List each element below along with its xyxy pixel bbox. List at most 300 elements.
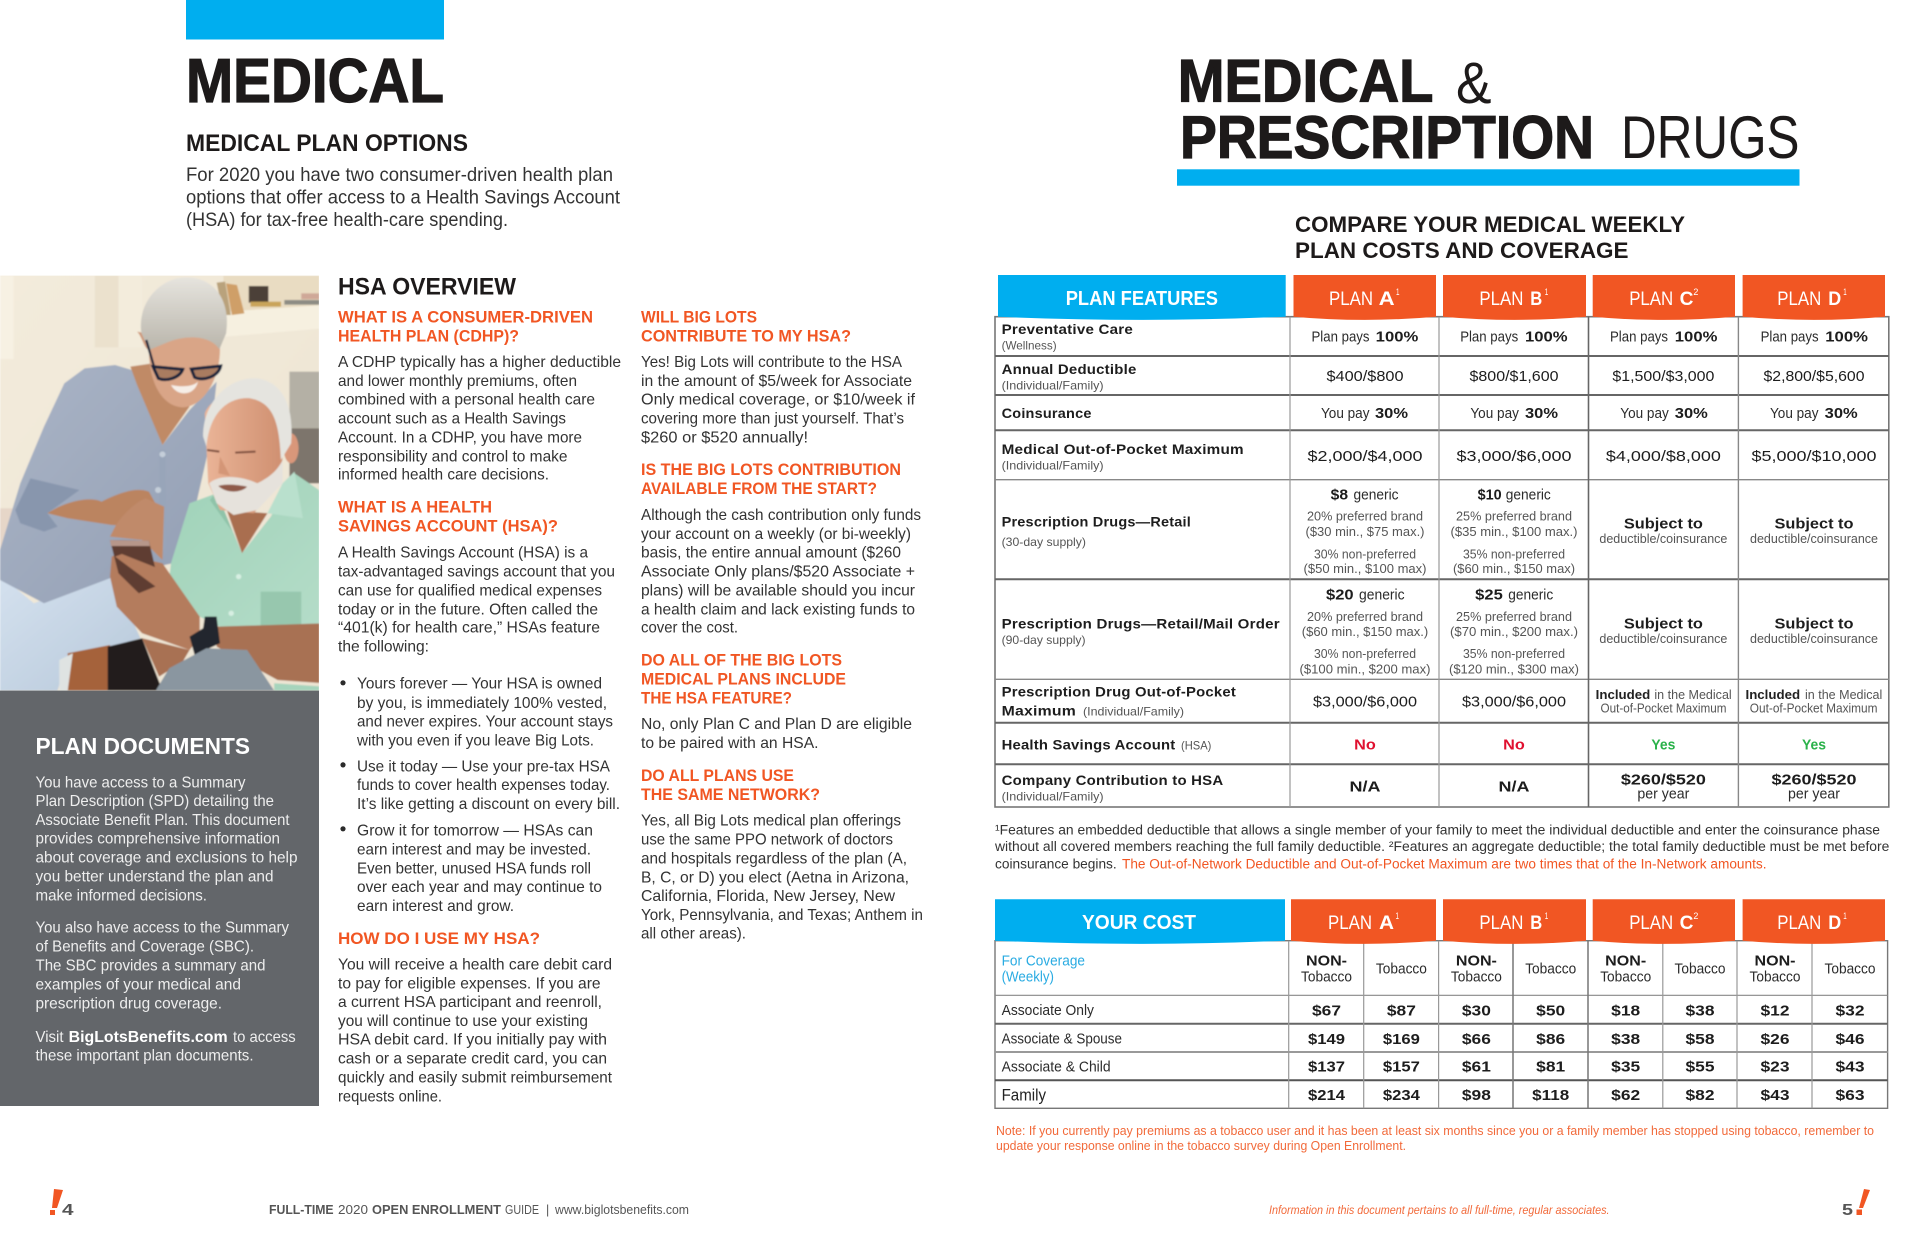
footer guide text: OPEN ENROLLMENT (372, 1203, 501, 1217)
hands and phone (110, 498, 164, 560)
row: associate and child (1002, 1059, 1864, 1076)
row: prescription drugs retail: generic (1354, 487, 1398, 503)
bullet list: funds to cover health expenses today. (357, 777, 610, 794)
header: plan C: 2 (1693, 911, 1698, 921)
row: associate and child: $23 (1760, 1059, 1790, 1076)
row: preventative care: 100% (1376, 329, 1418, 346)
row: prescription drugs retail/mail order: 25% preferred brand (1456, 610, 1572, 624)
row: company contribution to hsa: Company Contribution to HSA (1002, 772, 1223, 788)
row: for coverage weekly and tobacco headers: Tobacco (1600, 970, 1651, 986)
answer: same network: B, C, or D) you elect (Aetna in Arizona, (641, 869, 909, 886)
woman's chest and head (130, 363, 190, 445)
header: plan D: 1 (1843, 287, 1847, 297)
question: do all big lots plans include hsa: MEDICAL PLANS INCLUDE (641, 669, 846, 688)
footer right: disclaimer: Information in this document pertains to all full-time, regular associates. (1269, 1203, 1610, 1217)
question: will big lots contribute: CONTRIBUTE TO MY HSA? (641, 326, 851, 345)
row: prescription drugs retail/mail order: deductible/coinsurance (1750, 632, 1878, 646)
question: consumer-driven health plan: HEALTH PLAN (CDHP)? (338, 326, 519, 345)
header: plan C: PLAN (1629, 289, 1673, 310)
answer: how do I use my hsa (338, 956, 613, 1105)
table: plan features (995, 275, 1889, 807)
row: company contribution to hsa (1002, 771, 1856, 804)
answer: how do I use my hsa: You will receive a health care debit card (338, 956, 612, 973)
row: prescription drugs retail: (30-day supply) (1002, 535, 1086, 549)
row: family: $214 (1308, 1087, 1346, 1104)
row: for coverage weekly and tobacco headers: Tobacco (1301, 970, 1352, 986)
row: medical out-of-pocket maximum (1002, 441, 1876, 472)
header: plan B: PLAN (1479, 913, 1523, 934)
bullet list: Even better, unused HSA funds roll (357, 860, 591, 877)
intro text: options that offer access to a Health Savings Account (186, 187, 621, 209)
row: preventative care: Plan pays (1312, 330, 1370, 346)
answer: available from the start: a health claim and lack existing funds to (641, 601, 915, 618)
row: prescription drug out-of-pocket maximum: $3,000/$6,000 (1462, 694, 1566, 711)
row: preventative care: 100% (1825, 329, 1868, 346)
row: prescription drugs retail/mail order: generic (1508, 587, 1553, 603)
answer: do all big lots plans include hsa (641, 716, 912, 752)
heading: compare your medical weekly plan costs (1295, 212, 1685, 263)
heading: plan documents: PLAN DOCUMENTS (36, 733, 250, 759)
row: prescription drug out-of-pocket maximum: Prescription Drug Out-of-Pocket (1002, 684, 1236, 700)
row: prescription drugs retail: $8 (1331, 486, 1348, 503)
header: plan D: D (1828, 913, 1841, 934)
question: available from the start: AVAILABLE FROM THE START? (641, 479, 877, 498)
title: medical and prescription drugs: PRESCRIPTION (1180, 104, 1594, 171)
row: family: $43 (1760, 1087, 1790, 1104)
heading: medical plan options: MEDICAL PLAN OPTIONS (186, 130, 468, 157)
row: for coverage weekly and tobacco headers: Tobacco (1824, 961, 1876, 977)
row: company contribution to hsa: $260/$520 (1621, 771, 1706, 788)
footnotes: The Out-of-Network Deductible and Out-of-Pocket Maximum are two times that of the In-Network amounts. (1122, 856, 1766, 871)
row: for coverage weekly and tobacco headers: Tobacco (1750, 970, 1800, 986)
footnotes: without all covered members reaching the full family deductible. ²Features an aggregate deductible; the total family deductible must be met before (994, 839, 1889, 854)
row: associate and spouse: $86 (1536, 1031, 1565, 1048)
row: associate only: $30 (1462, 1003, 1491, 1020)
row: for coverage weekly and tobacco headers: Tobacco (1674, 961, 1726, 977)
row: annual deductible: Annual Deductible (1002, 361, 1137, 377)
row: prescription drugs retail: ($60 min., $150 max) (1453, 562, 1575, 576)
row: associate only (1002, 1003, 1864, 1020)
answer: will big lots contribute: in the amount of $5/week for Associate (641, 373, 912, 390)
row: family: $234 (1383, 1087, 1421, 1104)
row: prescription drugs retail: deductible/coinsurance (1599, 532, 1727, 546)
row: coinsurance: 30% (1675, 405, 1708, 422)
row: prescription drugs retail/mail order: 30% non-preferred (1314, 647, 1416, 661)
answer: consumer-driven health plan: Account. In a CDHP, you have more (338, 429, 582, 446)
row: for coverage weekly and tobacco headers: Tobacco (1451, 970, 1502, 986)
woman's trousers (0, 575, 140, 691)
row: prescription drugs retail/mail order: Subject to (1624, 615, 1703, 632)
row: prescription drug out-of-pocket maximum: in the Medical (1805, 688, 1882, 702)
row: associate and child: $55 (1686, 1059, 1714, 1076)
row: preventative care: Plan pays (1761, 330, 1819, 346)
plan documents paragraphs: BigLotsBenefits.com (69, 1029, 228, 1046)
row: health savings account: Health Savings Account (1002, 736, 1176, 752)
header: plan D: D (1828, 289, 1841, 310)
question: health savings account: SAVINGS ACCOUNT (HSA)? (338, 516, 558, 535)
row: prescription drugs retail: 20% preferred brand (1307, 510, 1423, 524)
row: prescription drug out-of-pocket maximum: in the Medical (1654, 688, 1732, 702)
row: associate and spouse: $38 (1611, 1031, 1640, 1048)
plan documents paragraphs: you better understand the plan and (36, 868, 274, 885)
header: plan C: 2 (1693, 287, 1698, 297)
answer: how do I use my hsa: quickly and easily submit reimbursement (338, 1069, 613, 1086)
row: prescription drugs retail: ($50 min., $100 max) (1304, 562, 1426, 576)
note: tobacco survey: update your response online in the tobacco survey during Open Enrollment. (996, 1139, 1406, 1153)
icon: exclamation mark (1856, 1189, 1870, 1215)
header: plan B: B (1530, 289, 1542, 310)
header: plan D: PLAN (1777, 913, 1821, 934)
bullet list: Use it today — Use your pre-tax HSA (357, 758, 610, 775)
row: for coverage weekly and tobacco headers: NON- (1456, 953, 1497, 970)
row: associate and spouse: $58 (1686, 1031, 1714, 1048)
header: plan B: PLAN (1479, 289, 1523, 310)
top blue tab (186, 0, 444, 40)
row: prescription drugs retail/mail order: Prescription Drugs—Retail/Mail Order (1002, 615, 1280, 631)
plan documents paragraphs: You have access to a Summary (36, 774, 246, 791)
row: associate and spouse (1002, 1031, 1864, 1048)
question: do all big lots plans include hsa: DO ALL OF THE BIG LOTS (641, 650, 842, 669)
row: family: $98 (1462, 1087, 1491, 1104)
answer: available from the start (641, 507, 921, 636)
row: health savings account (1002, 736, 1826, 753)
row: company contribution to hsa: N/A (1350, 779, 1381, 796)
footer left: page 4 (50, 1189, 689, 1219)
header: plan B (1443, 899, 1586, 944)
table: your cost (995, 899, 1888, 1108)
answer: same network: California, Florida, New Jersey, New (641, 888, 895, 905)
plan documents paragraphs: these important plan documents. (36, 1047, 254, 1064)
footer guide text: GUIDE (505, 1203, 539, 1217)
row: associate and child: $157 (1383, 1059, 1420, 1076)
icon: exclamation mark (50, 1189, 63, 1215)
answer: consumer-driven health plan: informed health care decisions. (338, 467, 549, 484)
bullet list: earn interest and may be invested. (357, 841, 591, 858)
header: plan A: PLAN (1329, 289, 1373, 310)
row: preventative care: Plan pays (1610, 330, 1668, 346)
row: prescription drugs retail/mail order: Subject to (1774, 615, 1854, 632)
row: medical out-of-pocket maximum: (Individual/Family) (1002, 458, 1104, 472)
row: associate and child: Associate & Child (1002, 1060, 1111, 1076)
header: plan D: 1 (1843, 911, 1847, 921)
text column: hsa questions 2 (641, 308, 923, 942)
row: prescription drug out-of-pocket maximum (1002, 684, 1882, 719)
header: plan B (1443, 275, 1586, 320)
photo: senior couple looking at a phone (0, 270, 325, 695)
header: plan C: PLAN (1629, 913, 1673, 934)
row: family: $63 (1836, 1087, 1864, 1104)
row: preventative care (1002, 321, 1868, 352)
question: do all big lots plans include hsa: THE HSA FEATURE? (641, 688, 792, 707)
row: prescription drug out-of-pocket maximum: $3,000/$6,000 (1313, 694, 1417, 711)
answer: will big lots contribute: covering more than just yourself. That’s (641, 410, 904, 427)
answer: same network: York, Pennsylvania, and Texas; Anthem in (641, 907, 923, 924)
row: health savings account: Yes (1802, 736, 1826, 753)
plan documents paragraphs: about coverage and exclusions to help (36, 849, 298, 866)
answer: how do I use my hsa: to pay for eligible expenses. If you are (338, 975, 601, 992)
answer: how do I use my hsa: requests online. (338, 1088, 442, 1105)
question: health savings account (338, 497, 558, 535)
row: prescription drugs retail: Prescription Drugs—Retail (1002, 514, 1191, 530)
chair (68, 645, 110, 691)
answer: consumer-driven health plan: A CDHP typically has a higher deductible (338, 354, 621, 371)
row: coinsurance: You pay (1620, 406, 1669, 422)
answer: health savings account: tax-advantaged savings account that you (338, 563, 615, 580)
header: plan A: 1 (1396, 287, 1400, 297)
row: prescription drugs retail: deductible/coinsurance (1750, 532, 1878, 546)
question: will big lots contribute (641, 308, 851, 345)
row: prescription drugs retail/mail order: 35% non-preferred (1463, 647, 1565, 661)
row: coinsurance: Coinsurance (1002, 405, 1092, 421)
row: associate only: $18 (1611, 1003, 1640, 1020)
row: prescription drugs retail: 30% non-preferred (1314, 547, 1416, 561)
answer: available from the start: Associate Only plans/$520 Associate + (641, 563, 915, 580)
table grid (995, 941, 1888, 1108)
answer: same network: use the same PPO network of doctors (641, 831, 893, 848)
row: prescription drugs retail/mail order: deductible/coinsurance (1599, 632, 1727, 646)
row: coinsurance (1002, 405, 1858, 422)
intro text: For 2020 you have two consumer-driven health plan (186, 164, 613, 186)
row: company contribution to hsa: $260/$520 (1772, 771, 1856, 788)
answer: consumer-driven health plan: account such as a Health Savings (338, 410, 566, 427)
row: prescription drug out-of-pocket maximum: Maximum (1002, 703, 1076, 719)
footer guide text: 2020 (338, 1203, 368, 1217)
row: coinsurance: You pay (1770, 406, 1819, 422)
answer: consumer-driven health plan: responsibility and control to make (338, 448, 568, 465)
row: medical out-of-pocket maximum: Medical Out-of-Pocket Maximum (1002, 441, 1244, 457)
row: annual deductible: $2,800/$5,600 (1764, 368, 1864, 385)
title: medical and prescription drugs: MEDICAL (1178, 48, 1434, 115)
header: plan A: PLAN (1328, 913, 1372, 934)
header: plan C: C (1680, 913, 1694, 934)
bullet list: by you, is immediately 100% vested, (357, 695, 607, 712)
title: medical and prescription drugs: DRUGS (1621, 104, 1800, 171)
row: prescription drugs retail/mail order: (90-day supply) (1002, 633, 1086, 647)
question: how do I use my hsa: HOW DO I USE MY HSA? (338, 929, 540, 948)
intro text: (HSA) for tax-free health-care spending. (186, 209, 508, 231)
title: medical: MEDICAL (186, 47, 444, 116)
answer: health savings account: can use for qualified medical expenses (338, 582, 602, 599)
row: annual deductible: $1,500/$3,000 (1612, 368, 1714, 385)
footnotes: coinsurance begins. (995, 856, 1117, 871)
plan documents paragraphs: of Benefits and Coverage (SBC). (36, 939, 254, 956)
plan documents paragraphs: to access (233, 1029, 296, 1046)
answer: same network: Yes, all Big Lots medical plan offerings (641, 812, 901, 829)
row: prescription drugs retail/mail order (1002, 586, 1878, 676)
question: available from the start (641, 460, 901, 498)
row: for coverage weekly and tobacco headers: NON- (1605, 953, 1646, 970)
answer: will big lots contribute: Only medical coverage, or $10/week if (641, 392, 916, 409)
answer: consumer-driven health plan: and lower monthly premiums, often (338, 373, 577, 390)
row: prescription drugs retail: $10 (1478, 486, 1502, 503)
bullet list: earn interest and grow. (357, 898, 514, 915)
row: for coverage weekly and tobacco headers (1002, 953, 1876, 986)
row: company contribution to hsa: per year (1788, 787, 1840, 803)
answer: same network: and hospitals regardless of the plan (A, (641, 850, 907, 867)
plan documents paragraphs: You also have access to the Summary (36, 920, 289, 937)
row: prescription drugs retail/mail order: generic (1359, 587, 1405, 603)
blue title rule (1177, 169, 1800, 186)
plan documents paragraphs: The SBC provides a summary and (36, 957, 266, 974)
row: annual deductible: $800/$1,600 (1470, 368, 1558, 385)
row: associate and child: $81 (1536, 1059, 1565, 1076)
header: plan C (1593, 899, 1735, 944)
header: plan C (1593, 275, 1735, 320)
row: prescription drugs retail: ($35 min., $100 max.) (1450, 525, 1578, 539)
header: your cost (995, 899, 1285, 944)
header: plan A (1291, 899, 1436, 944)
plan documents paragraphs: provides comprehensive information (36, 830, 280, 847)
bullet list: Grow it for tomorrow — HSAs can (357, 822, 593, 839)
row: prescription drug out-of-pocket maximum: Out-of-Pocket Maximum (1750, 702, 1878, 716)
plan documents paragraphs: make informed decisions. (36, 887, 207, 904)
woman's arm (47, 490, 159, 527)
intro text (186, 164, 621, 231)
row: preventative care: 100% (1525, 329, 1568, 346)
row: medical out-of-pocket maximum: $4,000/$8,000 (1606, 448, 1721, 465)
row: associate and spouse: $66 (1462, 1031, 1491, 1048)
row: coinsurance: You pay (1470, 406, 1520, 422)
row: prescription drugs retail: 25% preferred brand (1456, 510, 1572, 524)
header: plan B: 1 (1545, 911, 1548, 921)
answer: health savings account (338, 544, 615, 655)
question: available from the start: IS THE BIG LOTS CONTRIBUTION (641, 460, 901, 479)
title: medical and prescription drugs (1178, 48, 1800, 171)
answer: available from the start: Although the cash contribution only funds (641, 507, 921, 524)
note: tobacco survey (996, 1124, 1874, 1153)
answer: how do I use my hsa: cash or a separate credit card, you can (338, 1050, 607, 1067)
row: coinsurance: You pay (1321, 406, 1370, 422)
answer: how do I use my hsa: HSA debit card. If you initially pay with (338, 1031, 607, 1048)
answer: consumer-driven health plan (338, 354, 621, 484)
row: annual deductible: (Individual/Family) (1002, 378, 1104, 392)
row: prescription drug out-of-pocket maximum: Included (1596, 688, 1650, 702)
note: tobacco survey: Note: If you currently pay premiums as a tobacco user and it has been at least six months since you or a family member has stopped using tobacco, remember to (996, 1124, 1874, 1138)
answer: health savings account: A Health Savings Account (HSA) is a (338, 544, 588, 561)
row: coinsurance: 30% (1525, 405, 1558, 422)
row: associate and spouse: $46 (1836, 1031, 1864, 1048)
row: annual deductible: $400/$800 (1326, 368, 1404, 385)
man's head (227, 510, 267, 553)
header: plan features (998, 275, 1286, 320)
answer: consumer-driven health plan: combined with a personal health care (338, 392, 595, 409)
question: same network (641, 766, 820, 804)
header: plan D: PLAN (1777, 289, 1821, 310)
footer right: page 5: 5 (1842, 1202, 1853, 1219)
header: plan B: B (1530, 913, 1542, 934)
answer: will big lots contribute: Yes! Big Lots will contribute to the HSA (641, 354, 902, 371)
footer guide text: | (546, 1203, 549, 1217)
footnotes: ¹Features an embedded deductible that allows a single member of your family to meet the individual deductible and enter the coinsurance phase (995, 822, 1880, 837)
header: your cost: YOUR COST (1082, 912, 1196, 934)
man's shirt (169, 473, 324, 627)
footer left: page 4: 4 (62, 1202, 74, 1219)
row: prescription drug out-of-pocket maximum: Out-of-Pocket Maximum (1600, 702, 1726, 716)
row: health savings account: No (1503, 736, 1525, 753)
row: health savings account: (HSA) (1181, 738, 1211, 752)
row: prescription drug out-of-pocket maximum: Included (1746, 688, 1800, 702)
question: same network: THE SAME NETWORK? (641, 785, 820, 804)
question: consumer-driven health plan (338, 308, 593, 345)
title: medical and prescription drugs: & (1456, 51, 1492, 116)
question: will big lots contribute: WILL BIG LOTS (641, 308, 757, 327)
header: plan D (1743, 899, 1885, 944)
row: for coverage weekly and tobacco headers: NON- (1754, 953, 1796, 970)
answer: available from the start: cover the cost. (641, 619, 738, 636)
row: medical out-of-pocket maximum: $3,000/$6,000 (1456, 448, 1572, 465)
row: for coverage weekly and tobacco headers: For Coverage (1002, 954, 1085, 970)
heading: compare your medical weekly plan costs: PLAN COSTS AND COVERAGE (1295, 238, 1628, 263)
row: prescription drugs retail/mail order: 20% preferred brand (1307, 610, 1423, 624)
table grid (995, 317, 1889, 807)
row: prescription drugs retail/mail order: ($100 min., $200 max) (1300, 662, 1430, 676)
row: coinsurance: 30% (1825, 405, 1858, 422)
bullet list (340, 676, 620, 915)
header: plan features: PLAN FEATURES (1066, 288, 1218, 310)
row: associate only: $38 (1686, 1003, 1714, 1020)
row: preventative care: Plan pays (1460, 330, 1518, 346)
row: prescription drugs retail: Subject to (1624, 515, 1703, 532)
row: associate only: $32 (1836, 1003, 1864, 1020)
bullet list: Yours forever — Your HSA is owned (357, 676, 602, 693)
row: preventative care: (Wellness) (1002, 338, 1057, 352)
answer: available from the start: basis, the entire annual amount ($260 (641, 544, 901, 561)
footer guide text: FULL-TIME (269, 1203, 334, 1217)
row: company contribution to hsa: per year (1637, 787, 1690, 803)
row: company contribution to hsa: (Individual/Family) (1002, 790, 1104, 804)
plan documents paragraphs: examples of your medical and (36, 976, 241, 993)
row: prescription drugs retail/mail order: $25 (1475, 586, 1503, 603)
row: associate only: $67 (1312, 1003, 1341, 1020)
answer: health savings account: the following: (338, 638, 429, 655)
row: associate and spouse: Associate & Spouse (1002, 1031, 1122, 1047)
plan documents paragraphs: Plan Description (SPD) detailing the (36, 793, 274, 810)
answer: will big lots contribute (641, 354, 916, 446)
bullet list: over each year and may continue to (357, 879, 602, 896)
row: health savings account: No (1354, 736, 1376, 753)
plan documents paragraphs: prescription drug coverage. (36, 995, 222, 1012)
row: associate and spouse: $26 (1760, 1031, 1790, 1048)
row: prescription drugs retail (1002, 486, 1878, 576)
answer: do all big lots plans include hsa: No, only Plan C and Plan D are eligible (641, 716, 912, 733)
header: plan A: A (1379, 289, 1395, 310)
answer: health savings account: today or in the future. Often called the (338, 601, 598, 618)
footer guide text: www.biglotsbenefits.com (554, 1203, 689, 1217)
row: prescription drug out-of-pocket maximum: (Individual/Family) (1083, 705, 1184, 719)
answer: how do I use my hsa: you will continue to use your existing (338, 1013, 588, 1030)
row: associate and child: $137 (1308, 1059, 1345, 1076)
row: for coverage weekly and tobacco headers: Tobacco (1376, 961, 1427, 977)
answer: available from the start: your account on a weekly (or bi-weekly) (641, 526, 911, 543)
row: associate and child: $61 (1462, 1059, 1491, 1076)
row: prescription drugs retail: generic (1506, 487, 1551, 503)
heading: hsa overview: HSA OVERVIEW (338, 274, 516, 301)
row: preventative care: Preventative Care (1002, 321, 1133, 337)
answer: health savings account: “401(k) for health care,” HSAs feature (338, 619, 600, 636)
answer: available from the start: plans) will be available should you incur (641, 582, 916, 599)
row: family: $82 (1686, 1087, 1714, 1104)
answer: same network (641, 812, 923, 942)
row: associate only: $87 (1387, 1003, 1416, 1020)
row: preventative care: 100% (1675, 329, 1717, 346)
row: family: $118 (1532, 1087, 1569, 1104)
row: prescription drugs retail: Subject to (1774, 515, 1854, 532)
question: do all big lots plans include hsa (641, 650, 846, 707)
plan documents paragraphs (36, 774, 298, 1064)
row: for coverage weekly and tobacco headers: (Weekly) (1002, 970, 1054, 986)
plan documents paragraphs: Associate Benefit Plan. This document (36, 812, 290, 829)
row: for coverage weekly and tobacco headers: NON- (1306, 953, 1347, 970)
